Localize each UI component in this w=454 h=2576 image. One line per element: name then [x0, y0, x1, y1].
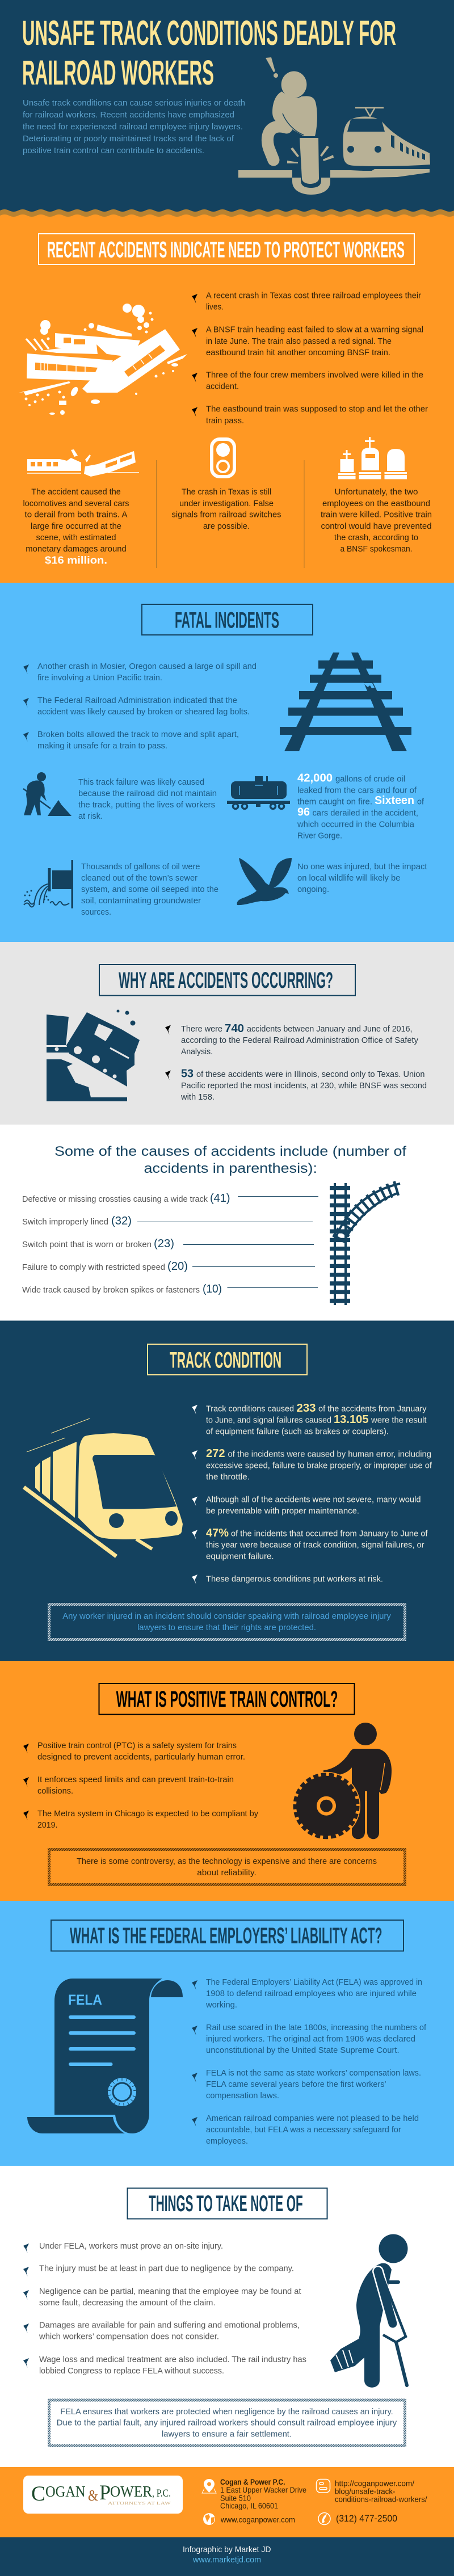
bullet list: FELA came several years before the first workers’ [206, 2080, 386, 2089]
icon: bird [237, 858, 292, 905]
bullet list: of these accidents were in Illinois, second only to Texas. Union [196, 1070, 424, 1079]
bullet list: of the incidents were caused by human error, including [228, 1450, 431, 1459]
text: oil leak: Sixteen [375, 794, 414, 807]
bullet list: The Federal Employers’ Liability Act (FELA) was approved in [206, 1978, 422, 1987]
column text: investigation: The crash in Texas is still [182, 488, 271, 497]
bullet list: which workers’ compensation does not consider. [39, 2333, 219, 2342]
bullet list: FELA is not the same as state workers’ compensation laws. [206, 2069, 421, 2078]
bullet list: of the accidents from January [318, 1405, 427, 1414]
cause: wide track: (10) [203, 1283, 222, 1295]
bullet list: lobbied Congress to replace FELA without success. [39, 2367, 224, 2376]
bullet list: 53 [181, 1068, 194, 1080]
cause: switch lined: Switch improperly lined [22, 1218, 108, 1227]
heading: FATAL INCIDENTS [175, 608, 279, 633]
bullet list [23, 662, 257, 751]
text: track failure [78, 778, 217, 821]
panel: credits [0, 2537, 454, 2576]
text: oil leak: of [417, 798, 424, 807]
bullet list: 47% [206, 1527, 229, 1539]
bullet list: train pass. [206, 416, 244, 426]
intro text: positive train control can contribute to accidents. [23, 146, 204, 155]
text: wildlife [297, 862, 427, 894]
panel: why are accidents occurring [0, 942, 454, 1125]
heading [51, 1920, 403, 1951]
icon: worker with shovel [23, 772, 72, 816]
panel: contact footer [0, 2467, 454, 2537]
bullet list: excessive speed, failure to brake properly, or improper use of [206, 1462, 432, 1471]
cause: crossties: (41) [210, 1192, 230, 1205]
bullet list: The Federal Railroad Administration indicated that the [37, 696, 237, 705]
logo: C [31, 2482, 45, 2506]
bullet list: The Metra system in Chicago is expected to be compliant by [37, 1809, 259, 1819]
bullet list: It enforces speed limits and can prevent train-to-train [37, 1775, 234, 1784]
icon: train falling off a cliff [47, 1010, 140, 1101]
bullet list: These dangerous conditions put workers at risk. [206, 1575, 383, 1584]
text: groundwater: Thousands of gallons of oil were [81, 862, 200, 872]
bullet list: A BNSF train heading east failed to slow at a warning signal [206, 326, 423, 335]
column text: accident: scene, with estimated [36, 533, 116, 542]
bullet list: with 158. [180, 1093, 215, 1102]
bullet list: The injury must be at least in part due to negligence by the company. [39, 2264, 294, 2274]
panel: causes of accidents [0, 1125, 454, 1321]
bullet list: Under FELA, workers must prove an on-site injury. [39, 2242, 223, 2251]
title: RAILROAD WORKERS [22, 53, 214, 92]
logo: P [99, 2481, 111, 2505]
cause: crossties [22, 1192, 318, 1205]
cause: wide track [22, 1283, 318, 1295]
bullet list: this year were because of track condition, signal failures, or [206, 1541, 424, 1550]
bullet list: Wage loss and medical treatment are also included. The rail industry has [39, 2355, 306, 2364]
column text: accident: locomotives and several cars [23, 499, 129, 508]
bullet list: Damages are available for pain and suffering and emotional problems, [39, 2321, 300, 2330]
intro text [23, 99, 245, 155]
text: groundwater: sources. [81, 908, 111, 917]
icon: leaking sewer pipe [24, 860, 73, 908]
text: track failure: the track, putting the lives of workers [78, 801, 215, 810]
bullet list: accountable, but FELA was a necessary safeguard for [206, 2125, 401, 2135]
bullet list: be preventable with proper maintenance. [206, 1507, 359, 1516]
bullet list: compensation laws. [206, 2091, 279, 2101]
heading [99, 965, 355, 995]
icon: person with train wheel [292, 1723, 392, 1840]
text: track failure: because the railroad did not maintain [78, 789, 217, 798]
text: oil leak: leaked from the cars and four of [297, 786, 417, 795]
text: oil leak: gallons of crude oil [335, 775, 405, 784]
logo: OGAN [45, 2483, 85, 2500]
logo: & [88, 2487, 98, 2504]
icon: location pin [202, 2479, 216, 2493]
bullet list: 1908 to defend railroad employees who are injured while [206, 1989, 417, 1998]
bullet list: working. [205, 2001, 237, 2010]
bullet list: Although all of the accidents were not severe, many would [206, 1496, 421, 1505]
cause: restricted speed: Failure to comply with restricted speed [22, 1263, 165, 1272]
icon: phone [318, 2512, 330, 2525]
panel: header [0, 0, 454, 218]
callout: Due to the partial fault, any injured railroad workers should consult railroad employee injury [57, 2418, 397, 2427]
column text: accident: large fire occurred at the [31, 522, 121, 531]
bullet list: eastbound train hit another oncoming BNSF train. [206, 348, 390, 357]
callout: lawyers to ensure that their rights are protected. [137, 1623, 316, 1632]
callout [49, 1605, 405, 1640]
text: oil leak: them caught on fire. [297, 798, 372, 807]
icon: worker with leg trapped in track beside a train [238, 57, 430, 195]
panel: track condition [0, 1321, 454, 1661]
bullet list [192, 1402, 432, 1584]
wave border [0, 209, 454, 218]
bullet list [192, 292, 428, 426]
text: oil leak: River Gorge. [297, 832, 342, 841]
column text: employees killed: the crash, according to [334, 533, 418, 542]
text: track failure: This track failure was likely caused [78, 778, 204, 787]
text: groundwater: system, and some oil seeped into the [81, 885, 218, 894]
text: oil leak: 96 [297, 806, 310, 818]
column text: employees killed: Unfortunately, the two [335, 488, 418, 497]
heading: TRACK CONDITION [170, 1348, 281, 1373]
bullet list: accidents between January and June of 2016, [247, 1025, 412, 1034]
heading [99, 1683, 354, 1715]
bullet list: making it unsafe for a train to pass. [37, 742, 167, 751]
column text: investigation: are possible. [203, 522, 250, 531]
bullet list: fire involving a Union Pacific train. [37, 674, 162, 683]
bullet list: American railroad companies were not pleased to be held [206, 2114, 419, 2123]
cause: switch lined: (32) [111, 1215, 132, 1227]
icon: railway signal [212, 439, 234, 477]
bullet list: Three of the four crew members involved were killed in the [206, 371, 423, 380]
text: wildlife: No one was injured, but the impact [297, 862, 427, 872]
text: oil leak: cars derailed in the accident, [312, 809, 418, 818]
column text: investigation [171, 488, 281, 531]
logo: , P.C. [152, 2487, 171, 2499]
column text: employees killed: train were killed. Positive train [321, 511, 432, 520]
blog url: blog/unsafe-track- [335, 2487, 395, 2495]
blog url: conditions-railroad-workers/ [335, 2495, 427, 2503]
icon: injured man on crutch [330, 2234, 407, 2388]
bullet list: 233 [296, 1402, 316, 1415]
bullet list: accident. [206, 382, 239, 392]
panel: fatal incidents [0, 583, 454, 942]
intro text: for railroad workers. Recent accidents have emphasized [23, 111, 234, 120]
column text: investigation: under investigation. False [179, 499, 274, 508]
bullet list: were the result [371, 1416, 427, 1425]
column text: employees killed [321, 488, 432, 554]
cause: switch lined [22, 1215, 313, 1227]
icon: derailed trains [27, 449, 139, 477]
blog url: http://coganpower.com/ [335, 2480, 414, 2488]
bullet list: 13.105 [334, 1413, 369, 1426]
callout: There is some controversy, as the technology is expensive and there are concerns [77, 1857, 377, 1866]
column text: accident: monetary damages around [26, 545, 127, 554]
panel: things to take note of [0, 2166, 454, 2467]
icon: train crash [19, 304, 187, 415]
bullet list [165, 1022, 427, 1102]
bullet list: Analysis. [181, 1047, 213, 1057]
bullet list [23, 2242, 306, 2376]
icon: oil tank car [227, 776, 290, 809]
phone number: (312) 477-2500 [336, 2513, 397, 2524]
column text: accident: The accident caused the [31, 488, 121, 497]
address: Suite 510 [220, 2494, 251, 2502]
bullet list: 272 [206, 1447, 225, 1460]
icon: FELA scroll: FELA [68, 1992, 102, 2008]
address: Cogan & Power P.C. [220, 2478, 285, 2486]
logo: OWER [110, 2483, 152, 2500]
cause: restricted speed: (20) [167, 1260, 188, 1273]
heading [127, 2188, 327, 2219]
credit text: Infographic by Market JD [183, 2545, 271, 2554]
intro text: Unsafe track conditions can cause serious injuries or death [23, 99, 245, 108]
column text: accident: $16 million. [45, 555, 107, 566]
bullet list: in late June. The train also passed a red signal. The [206, 337, 392, 346]
bullet list: Positive train control (PTC) is a safety system for trains [37, 1741, 237, 1750]
column text: employees killed: employees on the eastbound [322, 499, 430, 508]
website: www.coganpower.com [220, 2516, 295, 2524]
bullet list: Negligence can be partial, meaning that the employee may be found at [39, 2287, 301, 2296]
bullet list: Pacific reported the most incidents, at 230, while BNSF was second [181, 1081, 427, 1091]
panel: positive train control [0, 1661, 454, 1901]
column text: accident: to derail from both trains. A [25, 511, 128, 520]
text: oil leak: which occurred in the Columbia [297, 820, 415, 830]
intro text: the need for experienced railroad employee injury lawyers. [23, 123, 243, 132]
bullet list: some fault, decreasing the amount of the claim. [39, 2299, 216, 2308]
heading: Some of the causes of accidents include (number of [54, 1144, 406, 1159]
callout: lawyers to ensure a fair settlement. [162, 2430, 292, 2439]
bullet list: injured workers. The original act from 1906 was declared [206, 2035, 415, 2044]
text: groundwater: cleaned out of the town’s sewer [81, 874, 197, 883]
text: oil leak [297, 772, 424, 841]
bullet list: accident was likely caused by broken or sheared lag bolts. [37, 708, 250, 717]
logo [23, 2476, 183, 2514]
address: 1 East Upper Wacker Drive [220, 2486, 306, 2494]
panel: federal employers' liability act [0, 1901, 454, 2166]
cause: switch point: (23) [154, 1238, 174, 1250]
bullet list: of the incidents that occurred from January to June of [231, 1530, 428, 1539]
text: wildlife: ongoing. [297, 885, 329, 894]
heading [142, 604, 313, 635]
bullet list: The eastbound train was supposed to stop and let the other [206, 405, 428, 414]
bullet list [23, 1741, 259, 1830]
bullet list: of equipment failure (such as brakes or couplers). [206, 1428, 389, 1437]
cause: crossties: Defective or missing crossties causing a wide track [22, 1195, 208, 1204]
address: Chicago, IL 60601 [220, 2502, 278, 2510]
heading: THINGS TO TAKE NOTE OF [149, 2191, 303, 2216]
bullet list: Track conditions caused [206, 1405, 294, 1414]
callout [49, 1850, 405, 1885]
heading: accidents in parenthesis): [144, 1161, 317, 1176]
blog url [335, 2480, 427, 2503]
icon: FELA scroll [27, 1979, 183, 2133]
text: groundwater [81, 862, 218, 917]
text: track failure: at risk. [78, 812, 103, 821]
logo: ATTORNEYS AT LAW [108, 2501, 171, 2506]
column text: accident [23, 488, 129, 566]
bullet list: equipment failure. [206, 1552, 274, 1561]
callout: Any worker injured in an incident should consider speaking with railroad employee injury [62, 1612, 392, 1621]
bullet list: 740 [225, 1022, 244, 1035]
column text: employees killed: a BNSF spokesman. [340, 545, 412, 554]
intro text: Deteriorating or poorly maintained tracks and the lack of [23, 134, 234, 144]
bullet list: A recent crash in Texas cost three railroad employees their [206, 292, 421, 301]
bullet list: the throttle. [206, 1473, 250, 1482]
icon: broken railroad track [280, 653, 411, 751]
bullet list: Rail use soared in the late 1800s, increasing the numbers of [206, 2023, 427, 2032]
bullet list: lives. [206, 303, 224, 312]
bullet list [192, 1978, 427, 2146]
icon: speeding train [24, 1419, 183, 1556]
panel: recent accidents [0, 209, 454, 583]
address [220, 2478, 306, 2510]
heading [148, 1344, 307, 1375]
text: groundwater: soil, contaminating groundwater [81, 896, 201, 906]
bullet list: 2019. [37, 1821, 58, 1830]
bullet list: collisions. [37, 1787, 73, 1796]
bullet list: Broken bolts allowed the track to move and split apart, [37, 730, 239, 739]
callout: about reliability. [197, 1868, 257, 1878]
bullet list: unconstitutional by the United State Supreme Court. [206, 2046, 400, 2055]
bullet list: to June, and signal failures caused [206, 1416, 331, 1425]
bullet list: Another crash in Mosier, Oregon caused a large oil spill and [37, 662, 257, 671]
bullet list: There were [181, 1025, 222, 1034]
bullet list: employees. [206, 2137, 248, 2146]
icon: globe [203, 2513, 215, 2525]
heading [54, 1144, 406, 1176]
bullet list: according to the Federal Railroad Administration Office of Safety [181, 1036, 419, 1045]
cause: switch point [22, 1238, 314, 1250]
text: oil leak: 42,000 [297, 772, 333, 784]
icon: track switch [335, 1183, 401, 1305]
column text: investigation: signals from railroad switches [171, 511, 281, 520]
text: wildlife: on local wildlife will likely be [297, 874, 401, 883]
column text: employees killed: control would have prevented [321, 522, 431, 531]
callout: FELA ensures that workers are protected when negligence by the railroad causes an injury. [60, 2407, 393, 2417]
credit url: www.marketjd.com [192, 2556, 261, 2565]
callout [49, 2400, 405, 2445]
bullet list: designed to prevent accidents, particularly human error. [37, 1753, 245, 1762]
icon: gravestones [338, 437, 407, 479]
cause: restricted speed [22, 1260, 315, 1273]
icon: blog [317, 2480, 330, 2493]
title [22, 14, 396, 92]
cause: wide track: Wide track caused by broken spikes or fasteners [22, 1286, 200, 1295]
cause: switch point: Switch point that is worn or broken [22, 1240, 152, 1249]
